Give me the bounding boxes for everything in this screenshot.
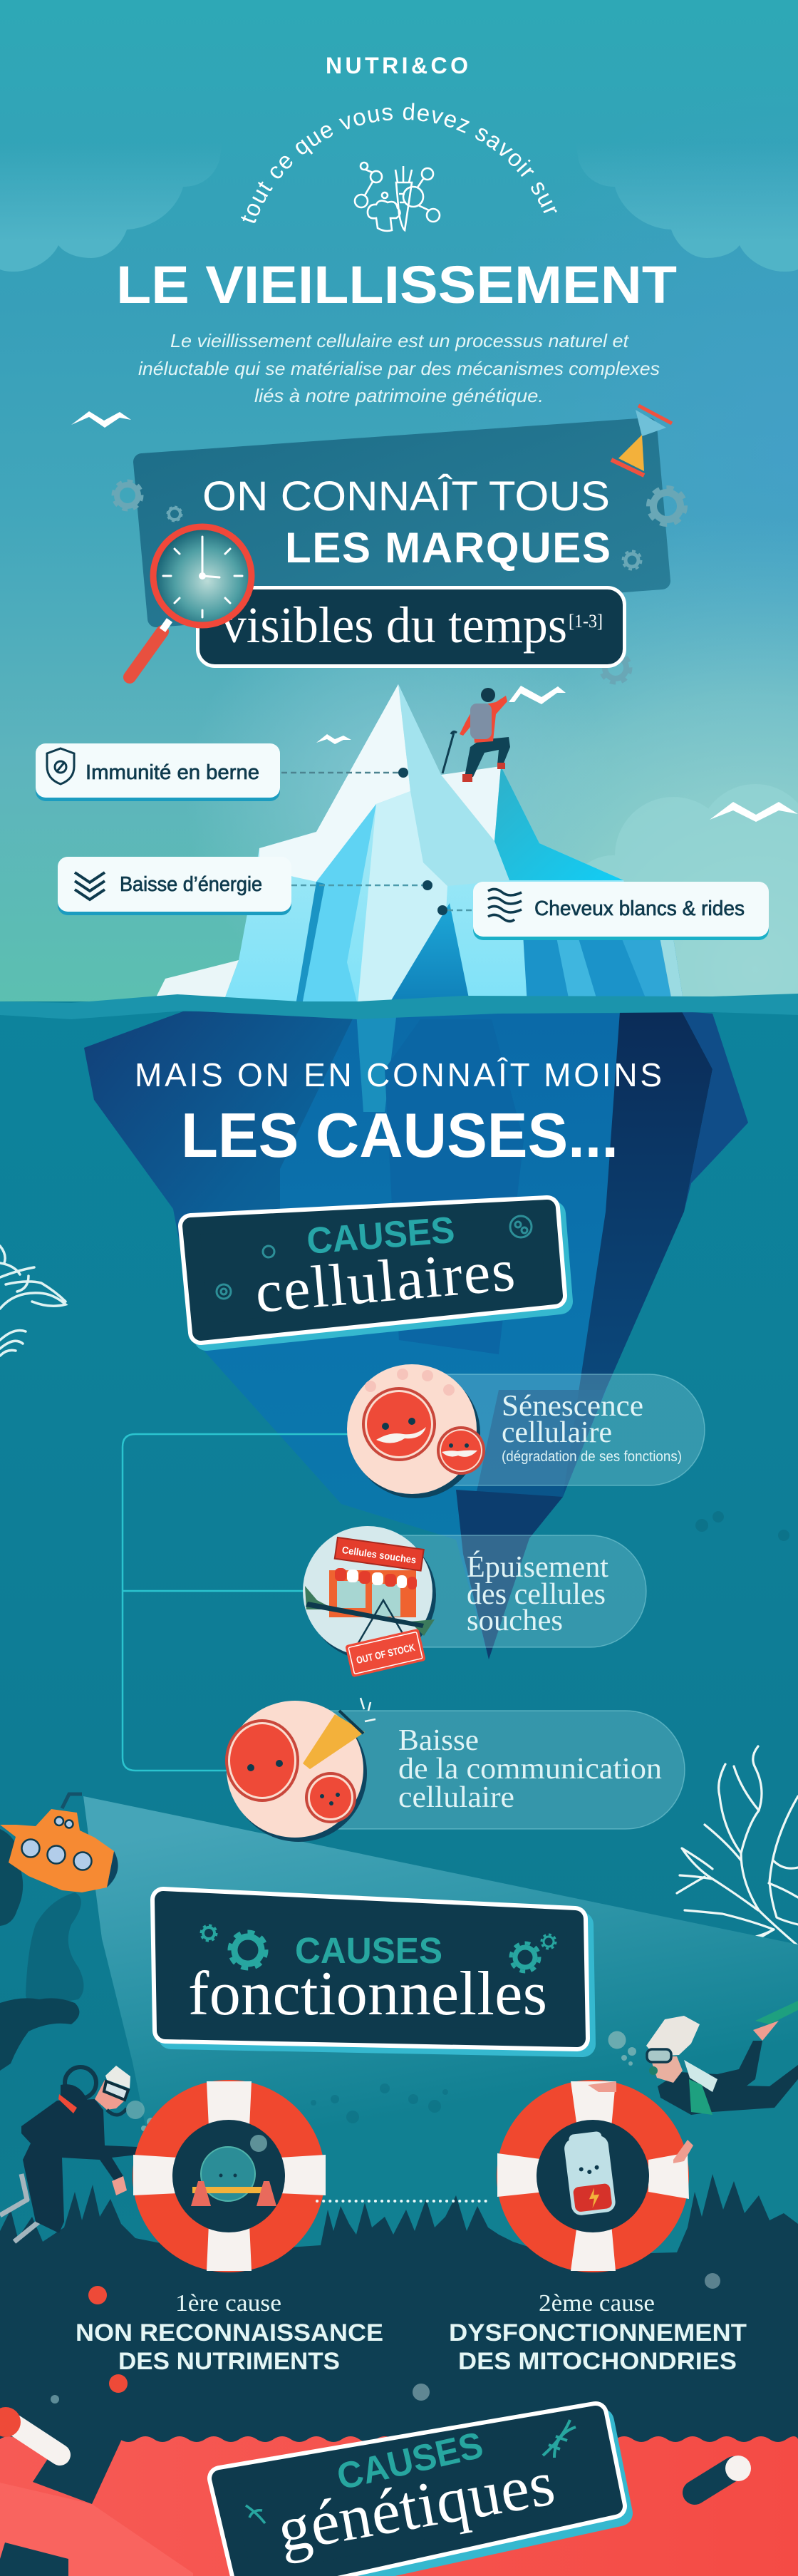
visibles du temps text: visibles du temps	[222, 597, 567, 654]
fonctionnelles label: fonctionnelles	[188, 1959, 547, 2029]
icon: shop out of stock: Cellules souches	[341, 1544, 417, 1566]
light beam from submarine	[83, 1796, 798, 2252]
description text: liés à notre patrimoine génétique.	[254, 385, 544, 406]
box: causes cellulaires	[191, 1208, 560, 1338]
diver hands	[588, 2081, 693, 2163]
panel: on connaît tous les marques	[142, 426, 662, 619]
génétiques label: génétiques	[272, 2448, 560, 2566]
references: [1-3]	[569, 611, 603, 632]
cause 2 text: 2ème cause	[539, 2290, 655, 2317]
pill text	[398, 1724, 662, 1814]
fish school center	[311, 2083, 448, 2123]
sea background	[0, 1001, 798, 2576]
connector: baisse	[291, 880, 432, 890]
connector: immunité	[281, 768, 408, 778]
label: baisse d'énergie	[58, 857, 291, 915]
pill text: cellulaire	[502, 1416, 612, 1449]
pill text: Sénescence	[502, 1390, 643, 1423]
cause 1 text	[76, 2290, 383, 2375]
cause 2 text	[449, 2290, 747, 2375]
climber	[442, 688, 510, 782]
cause 1 text: NON RECONNAISSANCE	[76, 2319, 383, 2346]
dark seaweed under submarine	[26, 1892, 84, 2009]
heading: on connaît tous: ON CONNAÎT TOUS	[202, 473, 610, 520]
portholes	[21, 1817, 91, 1870]
pill text: souches	[467, 1604, 563, 1637]
right coral	[677, 1746, 798, 1972]
cellulaires label: cellulaires	[253, 1237, 517, 1326]
connector: cheveux	[437, 905, 473, 915]
icon: DNA small	[246, 2505, 265, 2523]
icon: DNA top	[543, 2420, 576, 2458]
icon: low battery	[563, 2131, 616, 2216]
label text: Cheveux blancs & rides	[534, 897, 745, 920]
icon: senescent cells	[347, 1364, 485, 1498]
heading: les marques: LES MARQUES	[285, 524, 611, 572]
heading: mais on en connaît moins: MAIS ON EN CONNAÎT MOINS	[135, 1056, 662, 1093]
label: cheveux blancs et rides	[473, 882, 769, 940]
cause 1 text: 1ère cause	[175, 2290, 281, 2317]
icon: waves	[488, 889, 522, 922]
box: causes génétiques	[220, 2414, 620, 2576]
magnifying glass clock	[130, 527, 252, 677]
causes label: CAUSES	[305, 1210, 456, 1262]
box: visibles du temps	[198, 587, 624, 666]
pill text: Baisse	[398, 1724, 479, 1757]
gears	[201, 1925, 556, 1972]
dark seaweed left of submarine	[0, 1829, 23, 1926]
cause 2 text: DES MITOCHONDRIES	[458, 2348, 737, 2375]
hourglass	[611, 406, 672, 475]
pill: baisse de la communication cellulaire	[225, 1698, 685, 1842]
icon: shop out of stock	[303, 1526, 436, 1677]
lifebuoy 1	[133, 2080, 326, 2272]
diver left	[0, 2066, 155, 2242]
bird above climber	[509, 686, 566, 704]
icon: chevrons	[75, 872, 105, 900]
seabed and seaweed silhouette	[0, 2174, 798, 2452]
description text: inéluctable qui se matérialise par des mécanismes complexes	[138, 358, 660, 379]
bird: top left	[71, 411, 131, 428]
connector lines between causes	[123, 1434, 349, 1771]
label text: Baisse d’énergie	[120, 873, 262, 896]
bird near peak	[316, 734, 351, 744]
submarine	[0, 1794, 118, 1892]
dotted connector between lifebuoys	[317, 2200, 491, 2203]
dark seaweed left	[0, 1998, 79, 2071]
heading: les causes: LES CAUSES...	[181, 1100, 618, 1170]
title: LE VIEILLISSEMENT	[116, 255, 677, 314]
description text	[138, 330, 660, 406]
arched subtitle: tout ce que vous devez savoir sur	[241, 103, 557, 223]
pill text: (dégradation de ses fonctions)	[502, 1449, 682, 1465]
pill text: des cellules	[467, 1578, 606, 1611]
pill text: cellulaire	[398, 1781, 514, 1814]
cause 1 text: DES NUTRIMENTS	[118, 2348, 340, 2375]
label: immunité en berne	[36, 743, 280, 801]
red chromosome area	[0, 2407, 798, 2576]
icon: vegetables and molecules	[355, 163, 440, 231]
pill text: Épuisement	[467, 1550, 608, 1584]
lifebuoy 2	[497, 2080, 693, 2272]
icon: cells and flashlight	[225, 1698, 375, 1842]
far cloud right	[569, 784, 798, 1001]
bubbles	[51, 2273, 720, 2404]
left coral small	[0, 1246, 66, 1356]
pill: épuisement des cellules souches	[303, 1526, 646, 1677]
sky background	[0, 0, 798, 1012]
gears around panel	[113, 481, 685, 683]
cause 2 text: DYSFONCTIONNEMENT	[449, 2319, 747, 2346]
diver right	[608, 2001, 798, 2115]
iceberg above water	[157, 684, 684, 1005]
causes label: CAUSES	[333, 2424, 487, 2498]
pill text	[502, 1390, 682, 1465]
icon: cell blocked	[191, 2135, 276, 2206]
description text: Le vieillissement cellulaire est un processus naturel et	[170, 330, 630, 351]
box: causes fonctionnelles	[163, 1900, 583, 2044]
icon: shop out of stock: OUT OF STOCK	[356, 1642, 416, 1666]
underwater iceberg	[84, 1011, 748, 1659]
pill text: de la communication	[398, 1753, 662, 1786]
water line band	[0, 994, 798, 1019]
fish school upper right	[695, 1511, 789, 1541]
bird right	[710, 802, 798, 822]
pill text	[467, 1550, 608, 1637]
small cell icons	[217, 1216, 532, 1299]
label text: Immunité en berne	[86, 761, 259, 784]
clouds at the top	[0, 143, 798, 272]
causes label: CAUSES	[295, 1930, 442, 1971]
icon: shield	[47, 748, 74, 784]
pill: sénescence cellulaire	[347, 1364, 705, 1498]
logo: NUTRI&CO	[326, 53, 468, 78]
